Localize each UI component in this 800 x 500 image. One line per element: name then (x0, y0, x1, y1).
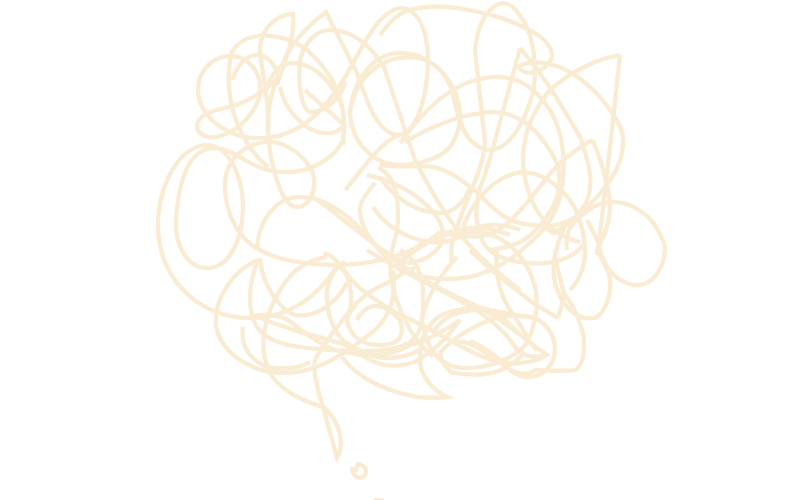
scribble: small ring (352, 464, 366, 478)
scribble: bottom fragment (374, 499, 384, 500)
scribble: main tangle (158, 3, 665, 458)
